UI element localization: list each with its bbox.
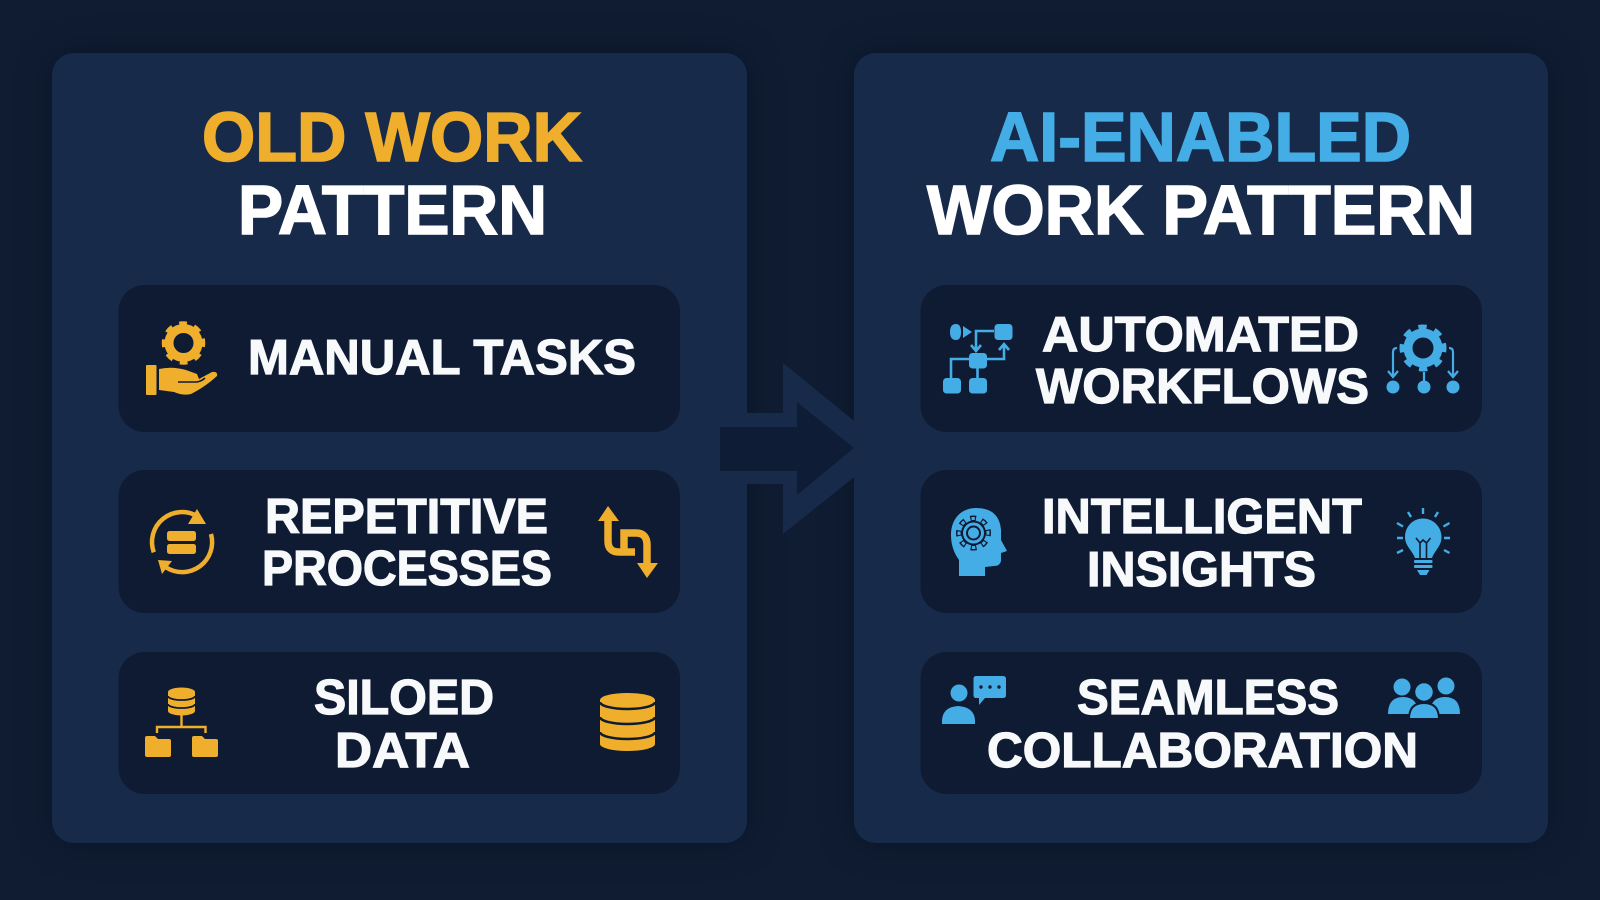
row: manual tasks <box>118 285 680 432</box>
arrow: old to AI-enabled transition <box>720 363 880 534</box>
heading: AI-enabled work pattern: AI-ENABLED <box>990 98 1411 176</box>
heading: AI-enabled work pattern: WORK PATTERN <box>927 171 1475 249</box>
label: seamless collaboration: COLLABORATION <box>987 724 1418 778</box>
row: seamless collaboration <box>920 652 1482 794</box>
label: repetitive processes: REPETITIVE <box>265 490 548 544</box>
label: seamless collaboration: SEAMLESS <box>1077 671 1339 725</box>
label: automated workflows <box>1036 308 1369 414</box>
row: intelligent insights <box>920 470 1482 613</box>
label: seamless collaboration <box>987 671 1418 778</box>
row: automated workflows <box>920 285 1482 432</box>
panel: old work pattern <box>52 53 747 843</box>
label: intelligent insights: INSIGHTS <box>1087 543 1316 597</box>
icon: light bulb <box>1397 508 1450 575</box>
icon: team of people <box>1388 678 1460 719</box>
label: siloed data: DATA <box>335 724 470 778</box>
row: siloed data <box>118 652 680 794</box>
label: repetitive processes <box>262 490 552 596</box>
icon: head with gear <box>951 508 1007 576</box>
heading: old work pattern: OLD WORK <box>202 98 582 176</box>
label: intelligent insights: INTELLIGENT <box>1042 490 1362 544</box>
heading: old work pattern <box>202 98 582 249</box>
icon: workflow diagram <box>943 324 1012 394</box>
label: siloed data <box>314 671 494 778</box>
label: manual tasks: MANUAL TASKS <box>248 331 636 385</box>
icon: person with speech bubble <box>942 676 1006 724</box>
heading: AI-enabled work pattern <box>927 98 1475 249</box>
heading: old work pattern: PATTERN <box>238 171 547 249</box>
icon: database to folders <box>145 688 218 757</box>
label: siloed data: SILOED <box>314 671 494 725</box>
icon: database <box>600 693 655 751</box>
label: repetitive processes: PROCESSES <box>262 542 552 596</box>
icon: hand holding gear <box>146 324 217 395</box>
icon: crossing route arrows <box>598 506 658 578</box>
label: automated workflows: AUTOMATED <box>1042 308 1359 362</box>
icon: sync cycle <box>152 509 212 574</box>
label: automated workflows: WORKFLOWS <box>1036 360 1369 414</box>
row: repetitive processes <box>118 470 680 613</box>
icon: gear with branching arrows <box>1386 327 1460 394</box>
panel: AI-enabled work pattern <box>854 53 1548 843</box>
label: intelligent insights <box>1042 490 1362 597</box>
